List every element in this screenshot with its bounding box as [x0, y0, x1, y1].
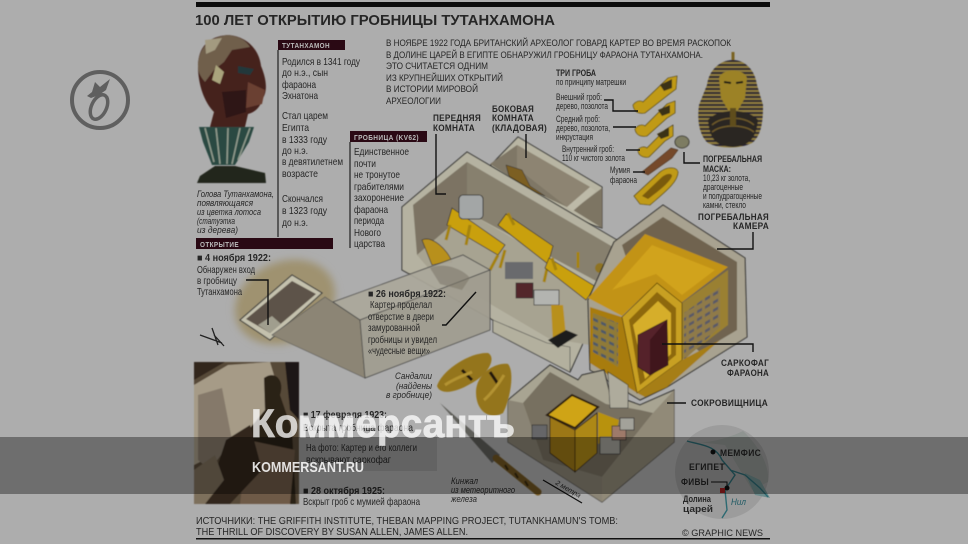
illustration: burial mask [698, 52, 763, 148]
panel: Tutankhamun biography: до н.э. [282, 217, 308, 229]
intro text: В ДОЛИНЕ ЦАРЕЙ В ЕГИПТЕ ОБНАРУЖИЛ ГРОБНИЦУ ФАРАОНА ТУТАНХАМОНА. [386, 49, 703, 61]
caption: sandals: в гробнице) [386, 390, 432, 400]
label: burial mask: ПОГРЕБАЛЬНАЯ [703, 154, 762, 164]
callout: photo caption [300, 437, 437, 471]
labels: three coffins: Внутренний гроб: [562, 144, 614, 154]
panel: Tutankhamun biography: в 1323 году [282, 205, 328, 217]
caption: sandals [386, 371, 432, 400]
timeline: 26 November 1922: отверстие в двери [368, 311, 434, 323]
panel: Tutankhamun biography: фараона [282, 79, 316, 91]
labels: three coffins: фараона [610, 175, 637, 185]
illustration: sandals [437, 353, 511, 415]
intro text: В ИСТОРИИ МИРОВОЙ [386, 83, 478, 95]
photo: Carter and colleague opening the sarcophagus [194, 362, 299, 504]
label: burial mask [684, 152, 762, 210]
panel: Tutankhamun biography: возрасте [282, 168, 318, 180]
caption: sandals: Сандалии [395, 371, 432, 381]
sources [196, 516, 618, 538]
intro text [386, 37, 731, 107]
label: side room: (КЛАДОВАЯ) [492, 123, 547, 133]
text: tomb description: почти [354, 158, 376, 170]
tag: discovery [196, 238, 333, 249]
intro text: ЭТО СЧИТАЕТСЯ ОДНИМ [386, 61, 488, 72]
icon: archaeologist tools [200, 328, 224, 346]
label: side room: БОКОВАЯ [492, 104, 534, 114]
caption: head statue [197, 189, 274, 235]
sources: THE THRILL OF DISCOVERY BY SUSAN ALLEN, JAMES ALLEN. [196, 527, 468, 538]
panel: Tutankhamun biography [278, 40, 361, 237]
title: 100 ЛЕТ ОТКРЫТИЮ ГРОБНИЦЫ ТУТАНХАМОНА [195, 12, 555, 29]
map: Egypt: ФИВЫ [681, 477, 709, 487]
illustration: treasury [508, 365, 674, 502]
labels: three coffins: дерево, позолота, [556, 123, 610, 133]
labels: three coffins [556, 68, 645, 185]
sources: ИСТОЧНИКИ: THE GRIFFITH INSTITUTE, THEBAN MAPPING PROJECT, TUTANKHAMUN'S TOMB: [196, 516, 618, 527]
labels: three coffins: дерево, позолота [556, 101, 608, 111]
scale: 2 metres [543, 479, 582, 503]
illustration: sealed corridor [272, 255, 490, 378]
timeline: 26 November 1922: «чудесные вещи» [368, 345, 430, 357]
timeline: 17 February 1923: Вскрыта гробница фараона [303, 422, 413, 434]
credit: © GRAPHIC NEWS [682, 528, 763, 539]
labels: three coffins: ТРИ ГРОБА [556, 68, 596, 78]
intro text: В НОЯБРЕ 1922 ГОДА БРИТАНСКИЙ АРХЕОЛОГ ГОВАРД КАРТЕР ВО ВРЕМЯ РАСКОПОК [386, 37, 731, 49]
illustration: front room [402, 152, 625, 372]
watermark: Kommersant: Коммерсантъ [251, 402, 515, 446]
caption: dagger: из метеоритного [451, 485, 515, 495]
timeline: 26 November 1922: Картер проделал [370, 299, 432, 311]
timeline: 4 November 1922: в гробницу [197, 275, 238, 287]
timeline: 4 November 1922 [197, 252, 271, 325]
map: Egypt: Долина [683, 494, 712, 504]
illustration: head of Tutankhamun [197, 35, 266, 183]
caption: head statue: из цветка лотоса [197, 207, 261, 217]
timeline: 4 November 1922: Обнаружен вход [197, 264, 255, 276]
label: sarcophagus [662, 344, 769, 378]
text: tomb description: Единственное [354, 146, 409, 158]
caption: head statue: Голова Тутанхамона, [197, 189, 274, 199]
panel: Tutankhamun biography: в девятилетнем [282, 156, 343, 168]
label: front room: КОМНАТА [433, 123, 475, 133]
text: tomb description [354, 146, 409, 250]
timeline: 28 October 1925 [303, 485, 420, 508]
panel: Tutankhamun biography: Эхнатона [282, 90, 318, 102]
label: burial chamber: ПОГРЕБАЛЬНАЯ [698, 212, 769, 222]
map: Egypt: Нил [731, 497, 746, 507]
intro text: ИЗ КРУПНЕЙШИХ ОТКРЫТИЙ [386, 72, 503, 84]
label: burial chamber: КАМЕРА [733, 221, 769, 231]
map: Egypt: МЕМФИС [720, 448, 761, 458]
label: front room [433, 113, 481, 194]
text: tomb description: периода [354, 215, 384, 227]
labels: three coffins: по принципу матрешки [556, 77, 626, 87]
label: burial mask: и полудрагоценные [703, 191, 762, 201]
watermark: site address: KOMMERSANT.RU [252, 459, 364, 476]
tag: discovery: ОТКРЫТИЕ [200, 242, 239, 249]
caption: dagger: Кинжал [451, 476, 478, 486]
label: sarcophagus: САРКОФАГ [721, 358, 769, 368]
label: treasury: СОКРОВИЩНИЦА [691, 398, 768, 408]
labels: three coffins: 110 кг чистого золота [562, 153, 625, 163]
text: tomb description: фараона [354, 204, 388, 216]
timeline: 4 November 1922: ■ 4 ноября 1922: [197, 252, 271, 264]
label: burial chamber [698, 212, 769, 249]
map: Egypt: царей [683, 504, 713, 514]
label: sarcophagus: ФАРАОНА [727, 368, 769, 378]
caption: head statue: из дерева) [197, 225, 238, 235]
caption: dagger [450, 476, 515, 504]
timeline: 17 February 1923: ■ 17 февраля 1923: [303, 409, 387, 421]
illustration: tomb entrance pit [221, 244, 349, 360]
caption: dagger: железа [450, 494, 477, 504]
logo: Kommersant monogram [72, 72, 128, 128]
scale: 2 metres: 2 метра [553, 479, 582, 500]
label: burial mask: 10,23 кг золота, [703, 173, 750, 183]
timeline: 26 November 1922: замурованной [368, 322, 420, 334]
panel: Tutankhamun biography: ТУТАНХАМОН [282, 43, 330, 50]
timeline: 4 November 1922: Тутанхамона [197, 286, 242, 298]
label: burial mask: МАСКА: [703, 164, 731, 174]
label: front room: ПЕРЕДНЯЯ [433, 113, 481, 123]
panel: Tutankhamun biography: Стал царем [282, 110, 328, 122]
labels: three coffins: Средний гроб: [556, 114, 600, 124]
top rule [196, 2, 770, 7]
illustration: side room [490, 137, 602, 228]
bottom rule [196, 538, 770, 540]
labels: three coffins: Внешний гроб: [556, 92, 602, 102]
callout: photo caption: вскрывают саркофаг [306, 454, 391, 466]
panel: Tutankhamun biography: в 1333 году [282, 134, 328, 146]
caption: head statue: (статуэтка [197, 216, 235, 226]
map: Egypt [675, 425, 770, 519]
panel: Tutankhamun biography: Египта [282, 122, 309, 134]
timeline: 28 October 1925: Вскрыт гроб с мумией фараона [303, 496, 420, 508]
label: side room [492, 104, 547, 158]
label: burial mask: драгоценные [703, 182, 743, 192]
timeline: 26 November 1922: гробницы и увидел [368, 334, 437, 346]
callout: photo caption: На фото: Картер и его коллеги [306, 442, 417, 454]
timeline: 26 November 1922 [368, 288, 476, 357]
label: burial mask: камни, стекло [703, 200, 746, 210]
illustration: meteoric iron dagger [440, 403, 538, 492]
text: tomb description: грабителями [354, 181, 404, 193]
panel: Tutankhamun biography: до н.э. [282, 145, 308, 157]
labels: three coffins: Мумия [610, 165, 630, 175]
map: Egypt: ЕГИПЕТ [689, 462, 725, 472]
caption: head statue: появляющаяся [197, 198, 253, 208]
tag: tomb KV62: ГРОБНИЦА (KV62) [354, 135, 419, 142]
caption: sandals: (найдены [396, 381, 432, 391]
panel: Tutankhamun biography: Скончался [282, 193, 323, 205]
text: tomb description: Нового [354, 227, 381, 239]
tag: tomb KV62 [350, 131, 427, 248]
label: side room: КОМНАТА [492, 113, 534, 123]
panel: Tutankhamun biography: Родился в 1341 году [282, 56, 361, 68]
timeline: 28 October 1925: ■ 28 октября 1925: [303, 485, 385, 497]
labels: three coffins: инкрустация [556, 132, 593, 142]
illustration: burial chamber and golden shrine [588, 205, 747, 400]
text: tomb description: царства [354, 238, 385, 250]
watermark band [0, 437, 968, 494]
text: tomb description: не тронутое [354, 169, 400, 181]
timeline: 17 February 1923 [303, 409, 413, 434]
illustration: three coffins and mummy [633, 76, 689, 205]
panel: Tutankhamun biography: до н.э., сын [282, 67, 328, 79]
text: tomb description: захоронение [354, 192, 404, 204]
timeline: 26 November 1922: ■ 26 ноября 1922: [368, 288, 446, 300]
intro text: АРХЕОЛОГИИ [386, 96, 441, 107]
